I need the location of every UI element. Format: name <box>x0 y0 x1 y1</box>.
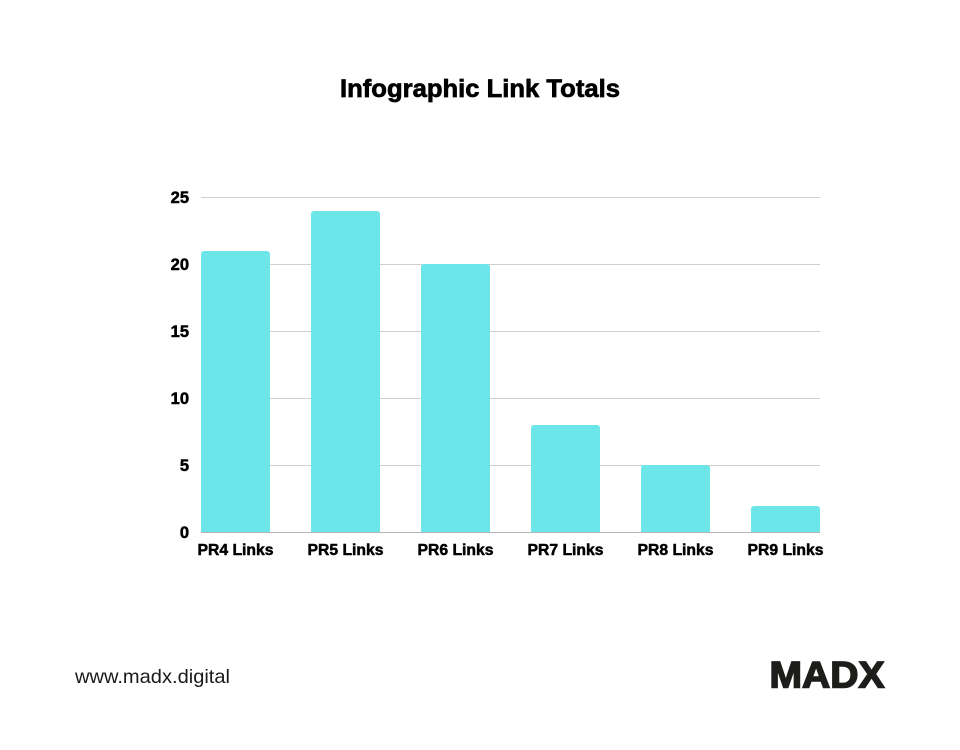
x axis labels: PR7 Links <box>528 542 604 559</box>
y axis labels <box>171 189 189 542</box>
y axis labels: 5 <box>180 457 189 475</box>
y axis labels: 25 <box>171 189 189 207</box>
x axis labels <box>198 542 824 559</box>
title: Infographic Link Totals <box>340 75 620 103</box>
y axis labels: 10 <box>171 390 189 408</box>
x axis labels: PR9 Links <box>748 542 824 559</box>
y axis labels: 15 <box>171 323 189 341</box>
logo: MADX: MADX <box>770 654 885 696</box>
x axis labels: PR6 Links <box>418 542 494 559</box>
bars <box>201 211 820 532</box>
x axis labels: PR4 Links <box>198 542 274 559</box>
y axis labels: 20 <box>171 256 189 274</box>
x axis labels: PR8 Links <box>638 542 714 559</box>
bar chart <box>171 189 824 559</box>
x axis labels: PR5 Links <box>308 542 384 559</box>
y axis labels: 0 <box>180 524 189 542</box>
website url: www.madx.digital <box>74 666 230 688</box>
